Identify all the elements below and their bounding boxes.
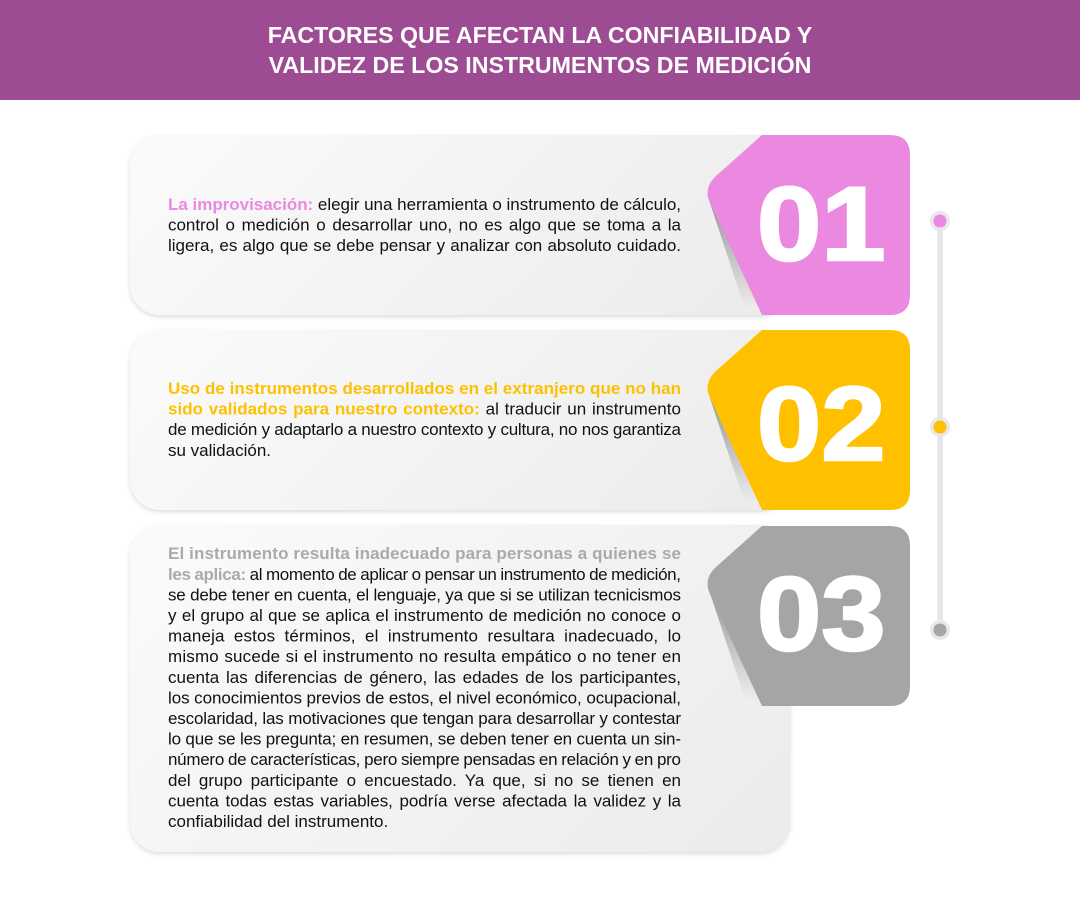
text block: card 03: les aplica: al momento de aplicar o pensar un instrumento de medición, (168, 565, 681, 584)
text block: card 03: número de características, pero siempre pensadas en relación y en pro (168, 750, 681, 769)
badge 01 (708, 135, 910, 315)
text block: card 03: del grupo participante o encuestado. Ya que, si no se tienen en (168, 771, 681, 790)
text block: card 01: La improvisación: elegir una herramienta o instrumento de cálculo, (168, 195, 681, 214)
panel: card 01 background (130, 135, 790, 315)
text block: card 03: El instrumento resulta inadecuado para personas a quienes se (168, 544, 681, 563)
text block: card 01 (168, 195, 682, 255)
timeline dot 02 (930, 417, 950, 437)
timeline dot 03 (930, 620, 950, 640)
title (268, 22, 812, 78)
text block: card 03: y el grupo al que se aplica el instrumento de medición no conoce o (168, 606, 681, 625)
number 03: 03 (757, 556, 885, 673)
text block: card 03: confiabilidad del instrumento. (168, 812, 388, 831)
text block: card 03: cuenta las diferencias de género, las edades de los participantes, (168, 668, 681, 687)
text block: card 02: su validación. (168, 441, 271, 460)
badge 02 (708, 330, 910, 510)
text block: card 02: Uso de instrumentos desarrollados en el extranjero que no han (168, 379, 681, 398)
title: FACTORES QUE AFECTAN LA CONFIABILIDAD Y (268, 22, 812, 48)
text block: card 03: escolaridad, las motivaciones que tengan para desarrollar y contestar (168, 709, 681, 728)
panel: card 02 background (130, 330, 790, 510)
timeline dot 01 (930, 211, 950, 231)
text block: card 03: lo que se les pregunta; en resumen, se deben tener en cuenta un sin- (168, 730, 681, 749)
text block: card 03: los conocimientos previos de estos, el nivel económico, ocupacional, (168, 688, 681, 707)
badge 03 (708, 526, 910, 706)
text block: card 03: cuenta todas estas variables, podría verse afectada la validez y la (168, 791, 682, 810)
number 02: 02 (757, 366, 885, 483)
timeline (930, 211, 950, 640)
text block: card 02: sido validados para nuestro contexto: al traducir un instrumento (168, 400, 681, 419)
text block: card 01: ligera, es algo que se debe pensar y analizar con absoluto cuidado. (168, 236, 681, 255)
text block: card 02 (168, 379, 682, 460)
panel: card 03 background (130, 525, 790, 852)
text block: card 01: control o medición o desarrollar uno, no es algo que se toma a la (168, 216, 682, 235)
text block: card 03 (168, 544, 682, 831)
text block: card 02: de medición y adaptarlo a nuestro contexto y cultura, no nos garantiza (168, 420, 682, 439)
number 01: 01 (757, 166, 885, 283)
text block: card 03: maneja estos términos, el instrumento resultara inadecuado, lo (168, 627, 681, 646)
text block: card 03: mismo sucede si el instrumento no resulta empático o no tener en (168, 647, 681, 666)
header band (0, 0, 1080, 100)
title: VALIDEZ DE LOS INSTRUMENTOS DE MEDICIÓN (269, 52, 811, 78)
text block: card 03: se debe tener en cuenta, el lenguaje, ya que si se utilizan tecnicismos (168, 585, 681, 604)
